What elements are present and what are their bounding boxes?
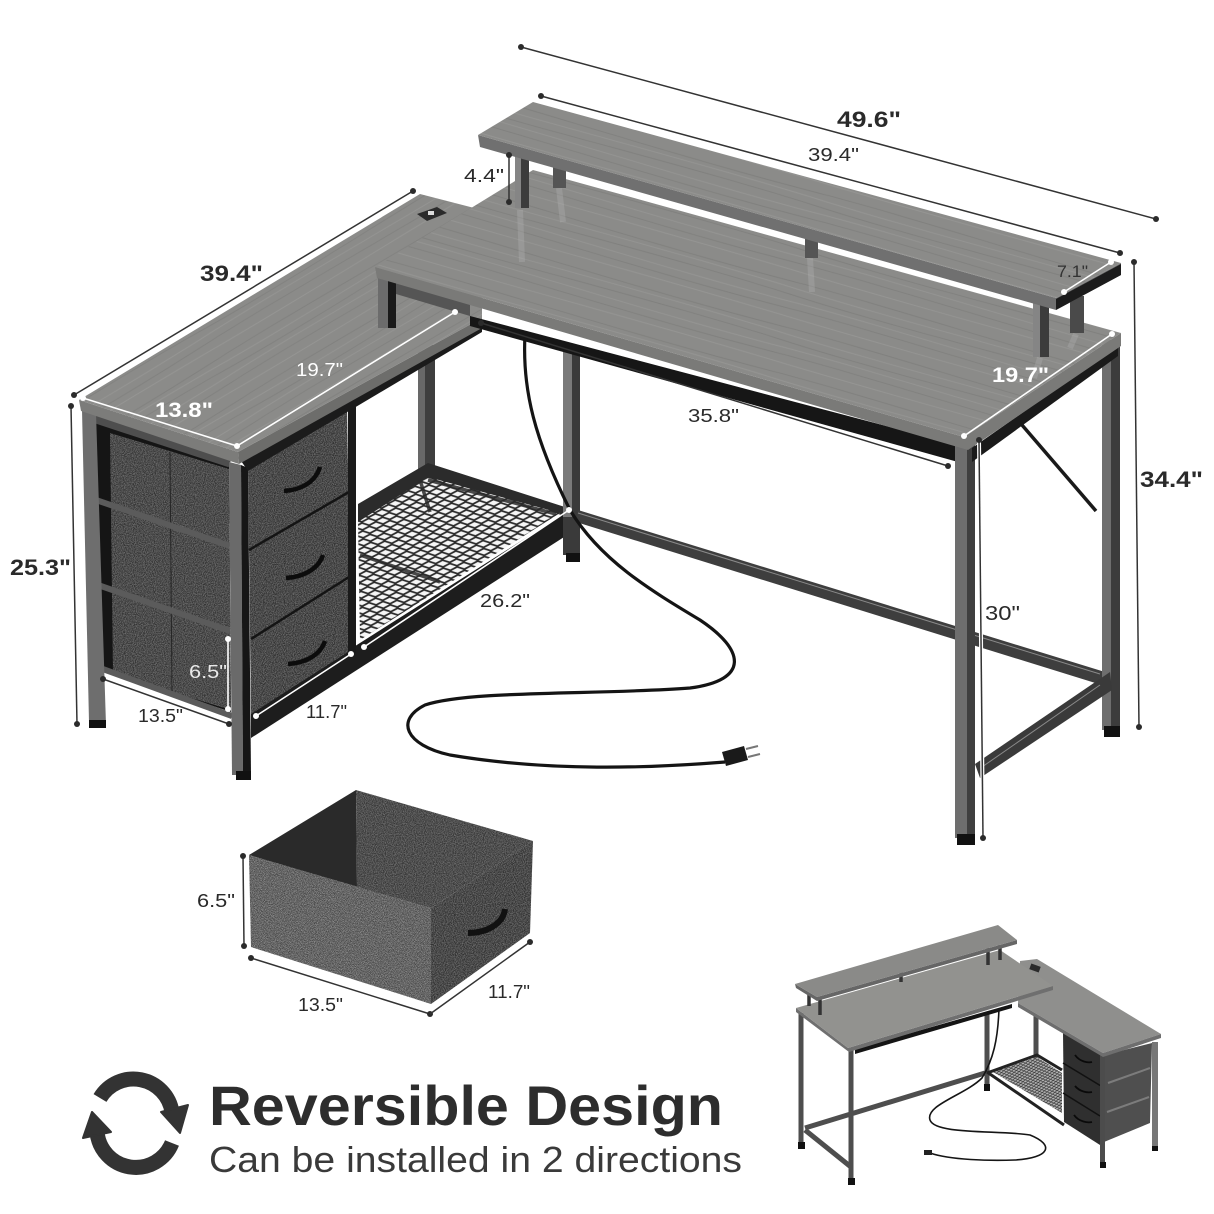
thumbnail grommet — [1029, 963, 1041, 973]
dimension: drawer width 11.7: 11.7" — [306, 702, 347, 722]
thumbnail riser — [795, 925, 1017, 997]
side mid rails — [96, 500, 232, 716]
dimension: wing length 39.4 — [71, 188, 416, 398]
thumbnail feet — [798, 1084, 990, 1185]
dimension: box width 11.7 — [430, 939, 533, 1014]
dimension: shelf width 26.2 — [361, 507, 572, 650]
dimension: drawer depth 13.5: 13.5" — [138, 706, 183, 726]
dimension: knee width 35.8: 35.8" — [688, 406, 739, 426]
icon: reversible arrows — [83, 1079, 188, 1167]
black under rail — [470, 316, 958, 462]
front corner leg — [229, 462, 251, 780]
front leg — [955, 440, 975, 845]
reversed desk thumbnail — [795, 925, 1161, 1185]
floor frame — [975, 672, 1112, 778]
heading: Reversible Design: Reversible Design — [209, 1074, 723, 1137]
dimension: total width 49.6: 49.6" — [837, 107, 901, 132]
mesh shadows — [360, 480, 556, 582]
dimension: box length 13.5 — [248, 955, 433, 1017]
mesh shelf — [358, 477, 560, 640]
desktop edge — [375, 267, 1121, 450]
thumbnail black under rail — [855, 1004, 1012, 1054]
far right leg — [1102, 340, 1120, 737]
back wing leg — [418, 345, 435, 473]
back frame and mesh shelf — [251, 345, 1105, 738]
dimension: cabinet height 25.3: 25.3" — [10, 555, 71, 580]
dimension: cabinet height 25.3 — [10, 403, 80, 727]
lower cabinet rail — [251, 510, 575, 738]
main desk — [375, 102, 1121, 845]
power cable — [408, 335, 734, 767]
dimension: riser depth 7.1 — [1057, 259, 1114, 295]
thumbnail legs and rails — [801, 1012, 1036, 1182]
side rail — [972, 346, 1118, 462]
wing desktop — [79, 194, 482, 464]
dimension: riser height 4.4: 4.4" — [464, 166, 504, 186]
subheading: Can be installed in 2 directions — [209, 1139, 742, 1180]
leg reflections — [520, 188, 1076, 378]
dimension: total height 34.4 — [1131, 259, 1203, 730]
thumbnail wing top — [1018, 959, 1161, 1053]
dimension: shelf width 26.2: 26.2" — [480, 591, 530, 611]
dimension: box height 6.5 — [197, 853, 247, 949]
icon: power plug — [722, 746, 760, 766]
icon: drawer handle — [468, 909, 505, 933]
grommet outlet — [417, 207, 447, 221]
dimension: drawer depth 13.5 — [100, 676, 232, 727]
thumbnail desktop — [796, 950, 1053, 1048]
shelf back frame — [358, 463, 568, 524]
thumbnail riser edge — [795, 940, 1017, 1001]
thumbnail plug — [924, 1150, 932, 1155]
icon: drawer handles — [284, 467, 325, 664]
dimension: wing width 13.8: 13.8" — [155, 399, 213, 422]
monitor riser shelf — [478, 102, 1121, 310]
desktop top — [375, 170, 1121, 437]
dimension: desk depth 19.7: 19.7" — [992, 364, 1049, 387]
dimension: drawer height 6.5: 6.5" — [189, 662, 227, 682]
thumbnail cabinet — [1063, 1033, 1158, 1168]
dimension: box length 13.5: 13.5" — [298, 995, 343, 1015]
dimension: desk depth 19.7 — [961, 331, 1115, 439]
dimension: riser height 4.4 — [464, 152, 512, 205]
dimension: drawer height 6.5 — [189, 636, 231, 712]
thumbnail cable — [930, 1008, 1046, 1160]
riser legs — [515, 150, 1084, 357]
dimension: riser width 39.4: 39.4" — [808, 145, 859, 165]
dimension: desk height 30: 30" — [985, 603, 1020, 625]
cable brace — [1022, 425, 1096, 511]
thumbnail riser legs — [809, 945, 1000, 1015]
dimension: wing inner 19.7 — [237, 309, 458, 446]
corner leg — [563, 345, 580, 562]
drawer interior right — [356, 790, 533, 908]
rear left leg — [82, 410, 106, 728]
drawer fronts — [248, 407, 351, 714]
dimension: wing inner 19.7: 19.7" — [296, 360, 343, 380]
drawer front face — [249, 855, 431, 1004]
thumbnail shelf rail — [987, 1055, 1064, 1125]
dimension: knee width 35.8 — [478, 320, 951, 469]
file cabinet — [82, 320, 482, 780]
dimension: desk height 30 — [976, 437, 1020, 841]
drawer side face — [431, 841, 533, 1004]
drawer box — [249, 790, 533, 1004]
under-wing rail — [239, 320, 482, 471]
thumbnail mesh — [993, 1057, 1062, 1113]
cabinet side fabric panel — [84, 408, 231, 712]
drawer interior left — [249, 790, 357, 887]
dimension: total height 34.4: 34.4" — [1140, 467, 1203, 492]
long floor rail — [576, 510, 1105, 686]
dimension: total width 49.6 — [518, 44, 1159, 222]
dimension: box height 6.5: 6.5" — [197, 891, 235, 911]
thumbnail desktop edge — [796, 986, 1053, 1052]
dimension: box width 11.7: 11.7" — [488, 982, 530, 1002]
thumbnail wing edge — [1018, 1003, 1161, 1057]
left support — [378, 275, 470, 328]
dimension: wing length 39.4: 39.4" — [200, 261, 263, 286]
dimension: riser width 39.4 — [538, 93, 1123, 256]
cabinet post — [348, 405, 356, 653]
side rails — [84, 415, 230, 463]
dimension: wing width 13.8 — [80, 395, 240, 449]
dimension: riser depth 7.1: 7.1" — [1057, 262, 1088, 281]
dimension: drawer width 11.7 — [253, 651, 354, 722]
